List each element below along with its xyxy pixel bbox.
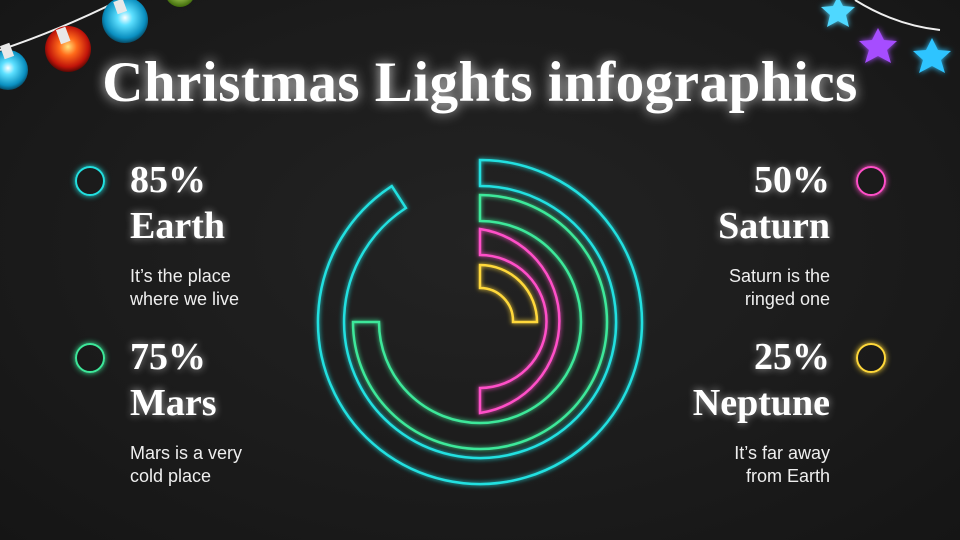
- block: earth: [126, 159, 239, 309]
- ring: neptune 25%: [480, 265, 537, 322]
- block: earth: Earth: [130, 205, 225, 247]
- block: saturn: Saturn is the: [729, 266, 830, 286]
- icon: neptune circle: [856, 343, 886, 373]
- title: Christmas Lights infographics: [102, 51, 858, 114]
- block: neptune: from Earth: [746, 466, 830, 486]
- block: mars: cold place: [130, 466, 211, 486]
- block: mars: 75%: [130, 336, 206, 378]
- block: saturn: 50%: [754, 159, 830, 201]
- block: saturn: Saturn: [718, 205, 830, 247]
- lights: top-right stars: [821, 0, 951, 73]
- ring: saturn 50%: [480, 229, 559, 413]
- block: saturn: ringed one: [745, 289, 830, 309]
- icon: mars circle: [75, 343, 105, 373]
- block: earth: 85%: [130, 159, 206, 201]
- block: saturn: [716, 159, 834, 309]
- ring: earth 85%: [318, 160, 642, 484]
- block: mars: Mars: [130, 382, 217, 424]
- block: earth: where we live: [130, 289, 239, 309]
- icon: saturn circle: [856, 166, 886, 196]
- block: mars: Mars is a very: [130, 443, 242, 463]
- icon: earth circle: [75, 166, 105, 196]
- block: neptune: 25%: [754, 336, 830, 378]
- block: neptune: It’s far away: [734, 443, 830, 463]
- block: mars: [128, 336, 242, 486]
- block: neptune: Neptune: [693, 382, 830, 424]
- block: neptune: [690, 336, 834, 486]
- ring: mars 75%: [353, 195, 607, 449]
- block: earth: It’s the place: [130, 266, 231, 286]
